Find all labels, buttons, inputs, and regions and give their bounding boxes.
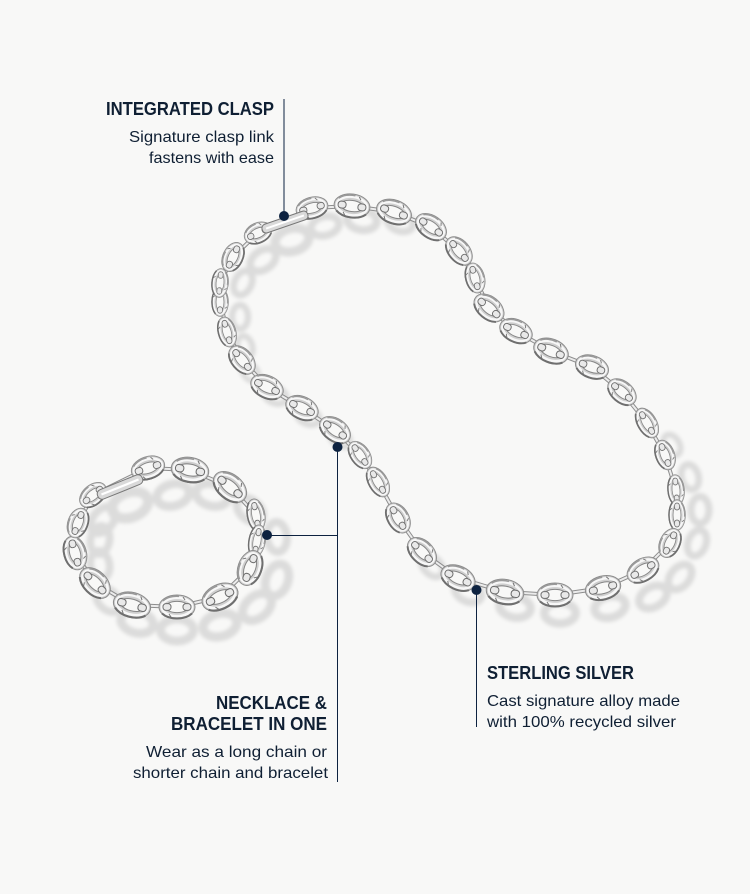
heading: STERLING SILVER [487,663,634,683]
bracelet connecting chain [75,468,257,607]
bracelet shadow [86,480,293,641]
leader lines and dots [262,442,342,782]
heading [171,693,327,734]
bracelet [60,452,268,622]
connecting chain [220,206,677,595]
description: Signature clasp link [129,129,275,146]
necklace shadow [230,208,710,624]
description [129,129,275,167]
heading: BRACELET IN ONE [171,714,327,734]
description [133,744,329,782]
description: shorter chain and bracelet [133,765,329,782]
description: Wear as a long chain or [146,744,328,761]
description: with 100% recycled silver [486,714,677,731]
necklace [210,192,686,608]
heading: NECKLACE & [216,693,327,713]
callout: sterling silver [472,585,680,731]
necklace clasp bar [261,210,309,234]
description: Cast signature alloy made [487,693,680,710]
callout: necklace and bracelet in one [133,442,342,782]
bracelet clasp bar [96,473,144,501]
leader line and dot [472,585,482,727]
description [486,693,680,731]
callout: integrated clasp [106,99,289,221]
heading: INTEGRATED CLASP [106,99,274,119]
description: fastens with ease [149,150,274,167]
leader line and dot [279,99,289,221]
